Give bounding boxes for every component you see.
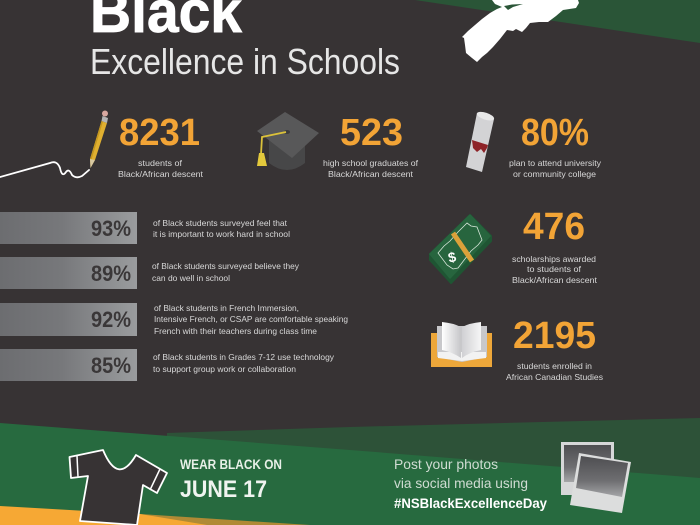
- stat: 8231 students: Black/African descent: [118, 169, 204, 179]
- green bay notch in map: [504, 4, 523, 10]
- stat: 2195 students: 2195: [513, 315, 596, 357]
- bar: 92%: [0, 303, 137, 336]
- stat: 523 graduates: [323, 112, 419, 179]
- callout: wear black: [180, 457, 282, 503]
- stat: 8231 students: students of: [138, 158, 183, 168]
- stat: 476 scholarships: Black/African descent: [512, 275, 598, 285]
- icon: money stack: [430, 215, 491, 283]
- bar: 85%: 85%: [91, 353, 131, 378]
- text: 92% description: French with their teachers during class time: [154, 326, 317, 336]
- stat: 476 scholarships: 476: [523, 206, 585, 248]
- text: 85% description: to support group work or collaboration: [153, 364, 296, 374]
- stat: 2195 students: students enrolled in: [517, 361, 592, 371]
- text: 93% description: it is important to work hard in school: [153, 229, 290, 239]
- stat: 8231 students: 8231: [119, 112, 200, 154]
- bar: 89%: [0, 257, 137, 289]
- text: 89% description: [152, 261, 300, 283]
- callout: social media: [394, 456, 547, 511]
- bar: 93%: [0, 212, 137, 244]
- stat: 8231 students: [118, 112, 204, 179]
- title: [90, 0, 400, 82]
- text: 93% description: of Black students surveyed feel that: [153, 218, 288, 228]
- text: 92% description: [154, 303, 348, 336]
- stat: 476 scholarships: [512, 206, 598, 285]
- bar: 89%: 89%: [91, 261, 131, 286]
- callout: social media: via social media using: [394, 475, 528, 491]
- stat: 2195 students: African Canadian Studies: [506, 372, 603, 382]
- text: 85% description: [153, 352, 335, 374]
- stat: 2195 students: [506, 315, 603, 382]
- bottom dark green band: [167, 418, 700, 525]
- stat: 476 scholarships: to students of: [527, 264, 582, 274]
- stat: 476 scholarships: scholarships awarded: [512, 254, 596, 264]
- callout: wear black: WEAR BLACK ON: [180, 457, 282, 472]
- bottom green band: [0, 423, 700, 525]
- stat: 80%: or community college: [513, 169, 596, 179]
- icon: pencil with squiggle: [0, 110, 108, 177]
- icon: graduation cap: [257, 112, 319, 170]
- bottom orange band: [0, 506, 310, 525]
- callout: wear black: JUNE 17: [180, 476, 267, 503]
- stat: 523 graduates: Black/African descent: [328, 169, 414, 179]
- stat: 80%: [509, 112, 602, 179]
- stat: 523 graduates: high school graduates of: [323, 158, 419, 168]
- text: 89% description: of Black students surveyed believe they: [152, 261, 300, 271]
- stat: 80%: plan to attend university: [509, 158, 602, 168]
- icon: open book: [431, 322, 492, 367]
- top green band: [415, 0, 700, 43]
- text: 93% description: [153, 218, 290, 239]
- stat: 523 graduates: 523: [340, 112, 403, 154]
- text: 85% description: of Black students in Grades 7-12 use technology: [153, 352, 335, 362]
- text: 89% description: can do well in school: [152, 273, 230, 283]
- callout: social media: #NSBlackExcellenceDay: [394, 495, 547, 511]
- title: Excellence in Schools: [90, 41, 400, 82]
- icon: diploma scroll: [466, 110, 495, 172]
- stat: 80%: 80%: [521, 112, 589, 154]
- text: 92% description: Intensive French, or CSAP are comfortable speaking: [154, 314, 348, 324]
- text: 92% description: of Black students in French Immersion,: [154, 303, 299, 313]
- icon: Nova Scotia map: [462, 0, 579, 62]
- icon: t-shirt: [70, 450, 167, 525]
- bar: 85%: [0, 349, 137, 381]
- bar: 93%: 93%: [91, 216, 131, 241]
- callout: social media: Post your photos: [394, 456, 498, 472]
- icon: photos: [561, 442, 631, 513]
- icon: money stack: $: [447, 248, 458, 266]
- bar: 92%: 92%: [91, 307, 131, 332]
